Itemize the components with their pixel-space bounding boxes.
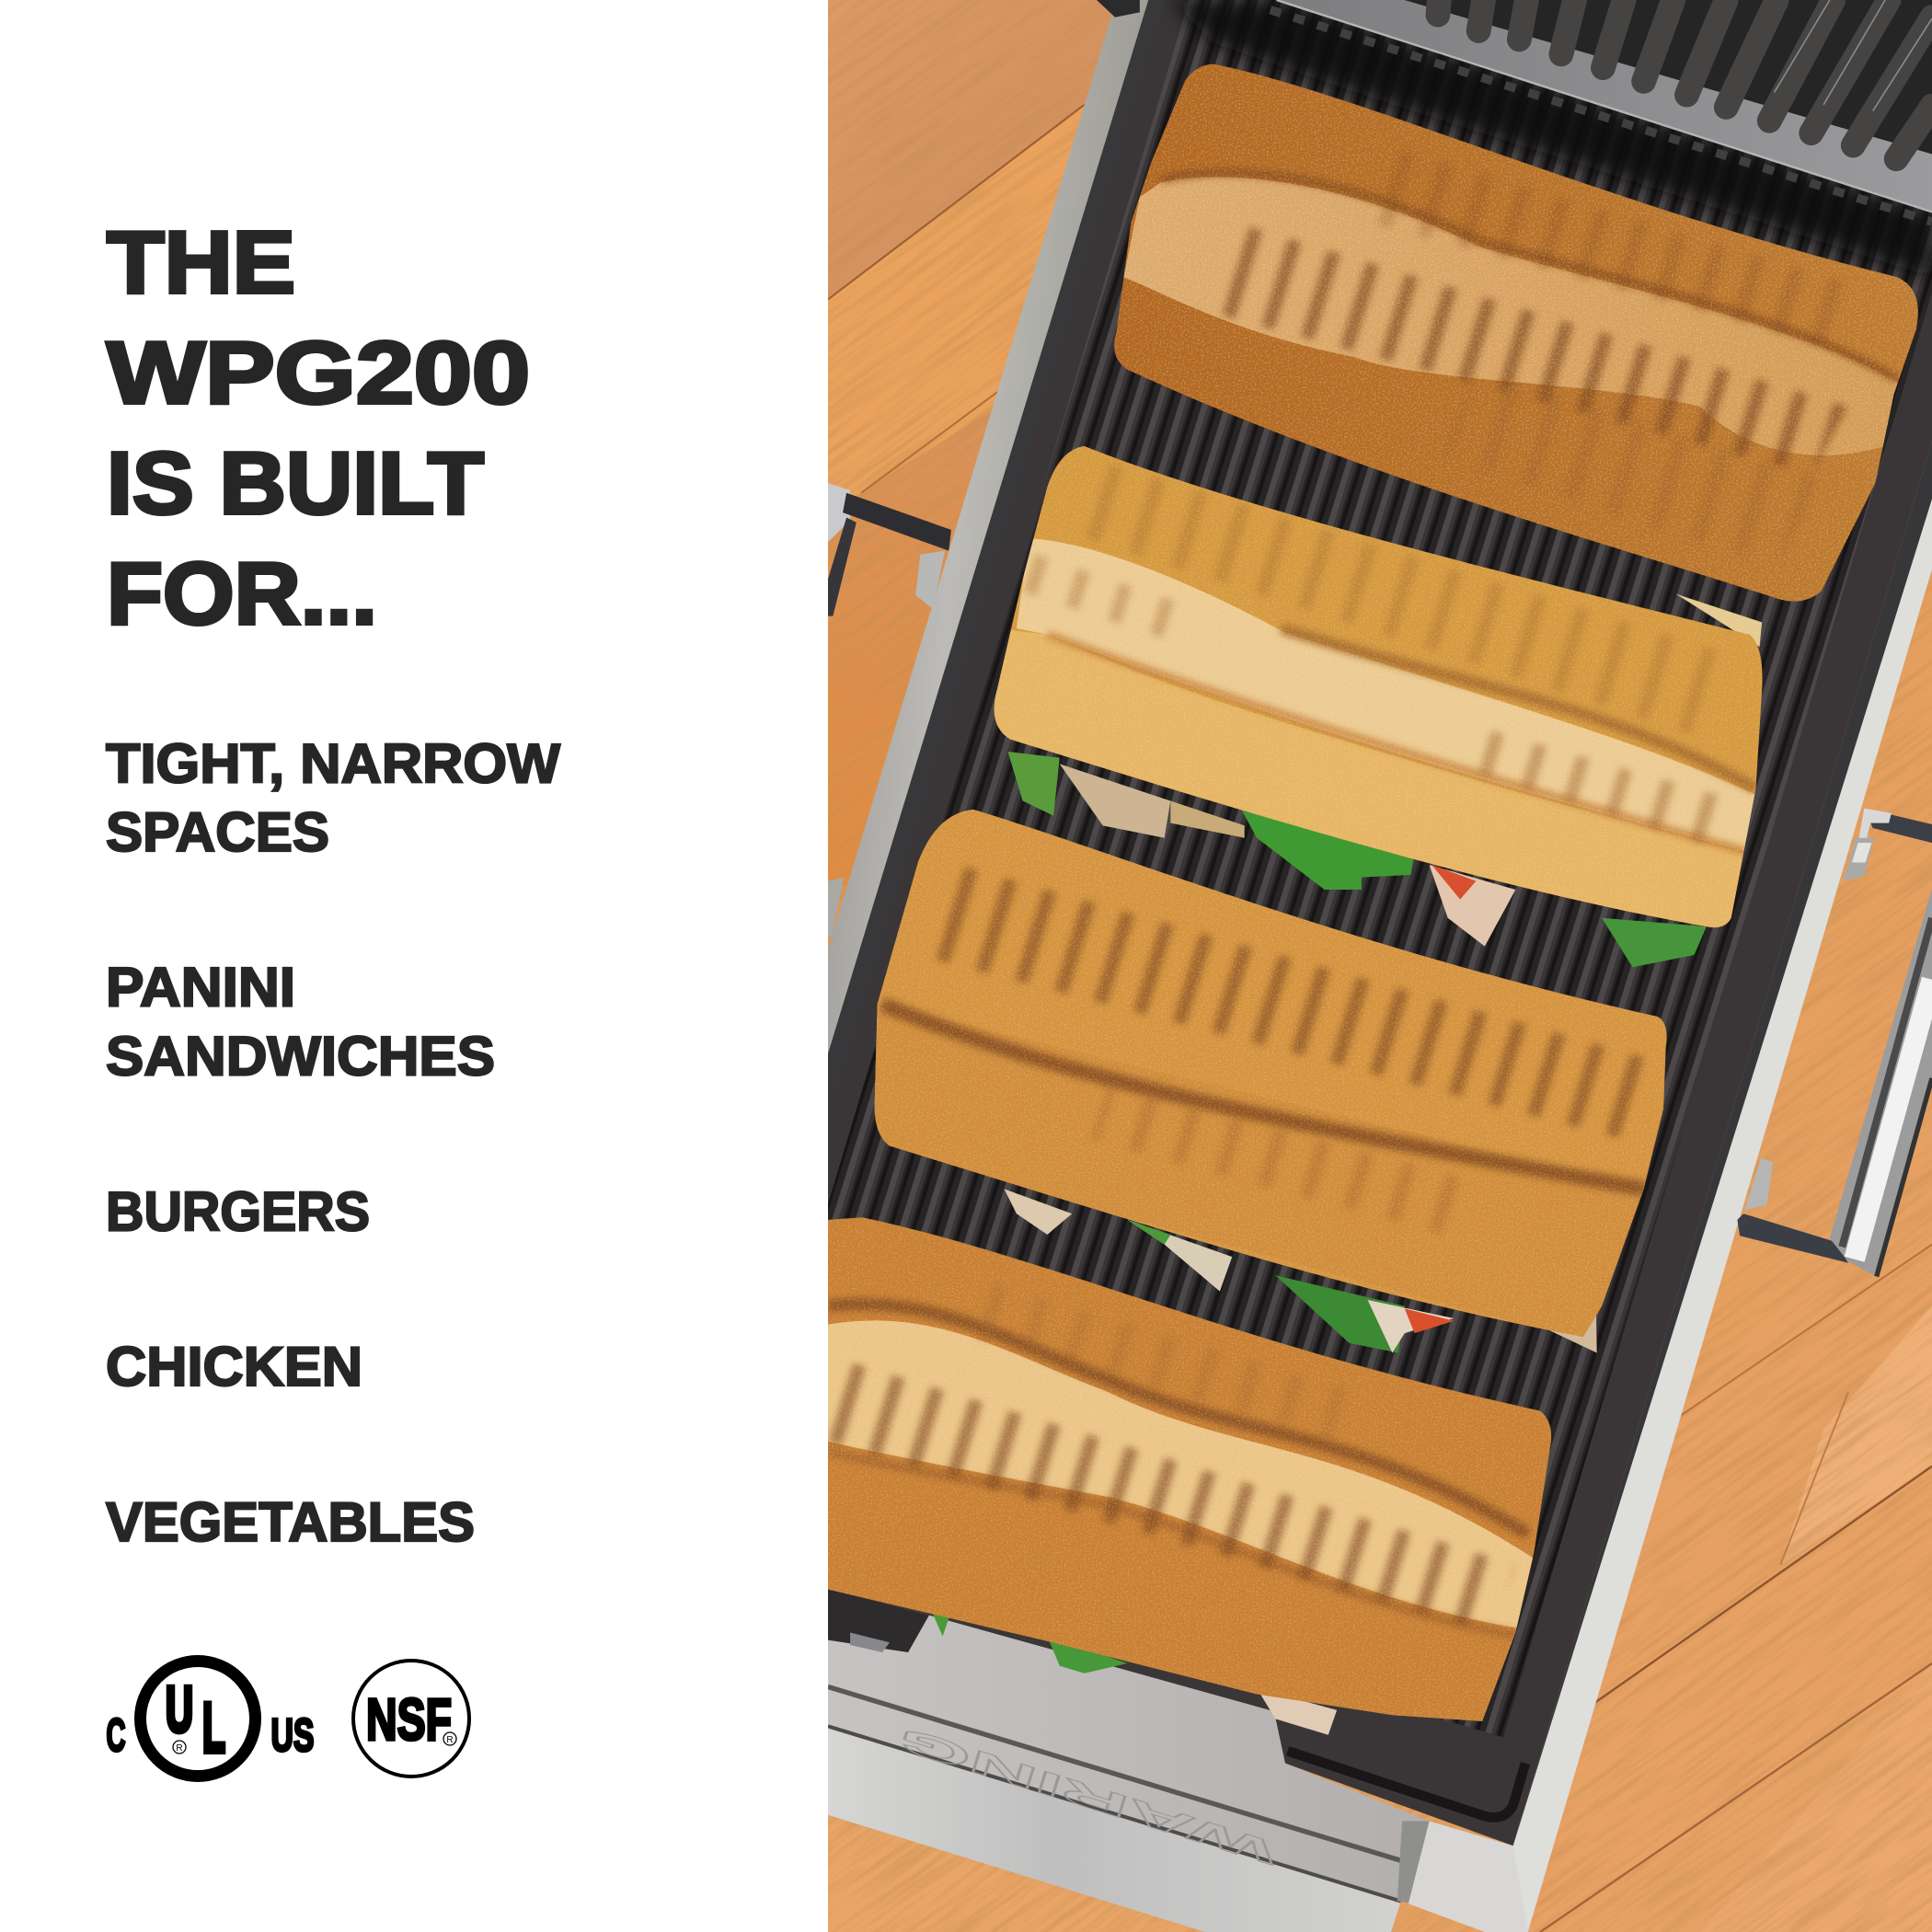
- steel left rail: [828, 0, 1148, 1053]
- icon: cULus certification mark: C: [107, 1709, 125, 1761]
- item: tight, narrow spaces: [106, 732, 560, 863]
- sandwich 1: [1097, 50, 1932, 616]
- sandwich 4 filling: [930, 1608, 1337, 1735]
- photo: grill with four sandwiches: [820, 0, 1932, 1932]
- use list: [106, 732, 560, 1553]
- icon: cULus certification mark: [107, 1662, 315, 1776]
- heading: WPG200: [107, 324, 530, 422]
- sandwich 3: [863, 801, 1675, 1343]
- icon: cULus certification mark: R: [176, 1743, 183, 1754]
- heading: [107, 213, 530, 643]
- icon: NSF certification mark: [353, 1661, 469, 1777]
- item: burgers: BURGERS: [106, 1181, 370, 1242]
- item: vegetables: VEGETABLES: [106, 1491, 475, 1553]
- cast iron lower plate: [828, 0, 1932, 1846]
- sandwich 3 filling: [1005, 1189, 1597, 1353]
- icon: cULus certification mark: U: [166, 1673, 193, 1745]
- wood countertop: [828, 0, 1932, 1932]
- upper platen ribs: [1405, 0, 1932, 159]
- item: chicken: CHICKEN: [106, 1336, 362, 1397]
- sandwich 2: [985, 437, 1775, 943]
- icon: NSF certification mark: R: [446, 1735, 454, 1745]
- white text panel: [0, 0, 828, 1932]
- icon: cULus certification mark: L: [202, 1689, 225, 1767]
- left handle: [828, 483, 951, 616]
- item: panini sandwiches: [106, 957, 495, 1087]
- sandwich 4: [820, 1207, 1558, 1725]
- item: panini sandwiches: SANDWICHES: [106, 1025, 495, 1087]
- item: panini sandwiches: PANINI: [106, 957, 295, 1018]
- icon: NSF certification mark: NSF: [366, 1686, 452, 1753]
- embossed brand on tray: WARING: [893, 1719, 1281, 1871]
- heading: FOR...: [107, 545, 377, 643]
- item: tight, narrow spaces: SPACES: [106, 801, 329, 863]
- icon: cULus certification mark: US: [270, 1709, 315, 1761]
- right handle: [1737, 809, 1932, 1277]
- steel band under upper platen: [1271, 0, 1932, 222]
- heading: THE: [107, 213, 295, 312]
- steel right rail: [1491, 441, 1932, 1932]
- sandwich 2 filling: [1008, 594, 1762, 967]
- heading: IS BUILT: [107, 434, 484, 533]
- front tray and drawer: [828, 1588, 1528, 1932]
- item: tight, narrow spaces: TIGHT, NARROW: [106, 732, 560, 795]
